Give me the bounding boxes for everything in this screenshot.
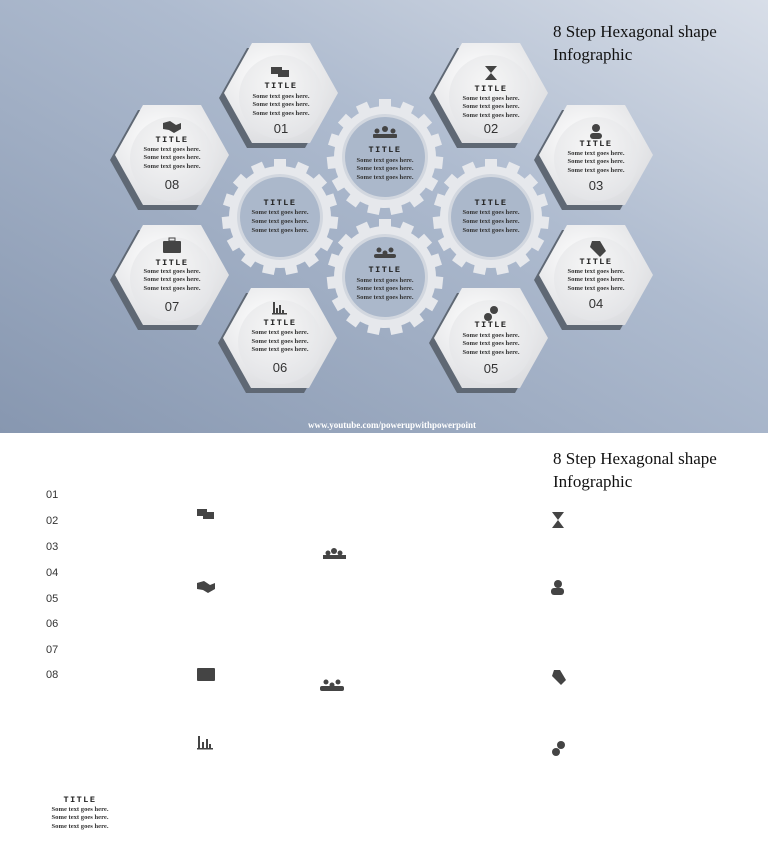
gear: right: Some text goes here. <box>462 218 520 225</box>
hex 03 <box>534 105 653 210</box>
title: 8 Step Hexagonal shape <box>553 22 717 41</box>
number list: 01 <box>46 489 58 501</box>
hex 07 <box>110 225 229 330</box>
bottom text block: TITLE <box>63 795 97 805</box>
gear: right: Some text goes here. <box>462 227 520 234</box>
footer url: www.youtube.com/powerupwithpowerpoint <box>308 420 476 430</box>
hex 04: 04 <box>589 296 603 311</box>
number list: 03 <box>46 541 58 553</box>
hex 03: Some text goes here. <box>567 150 625 157</box>
hex 06: Some text goes here. <box>251 329 309 336</box>
gear: top: Some text goes here. <box>356 165 414 172</box>
hex 01: Some text goes here. <box>252 101 310 108</box>
hex 04: TITLE <box>579 257 613 267</box>
hex 08: Some text goes here. <box>143 163 201 170</box>
hex 01: Some text goes here. <box>252 110 310 117</box>
title <box>553 22 717 64</box>
loose icons <box>197 509 566 756</box>
gear: right: TITLE <box>474 198 508 208</box>
bottom text block <box>51 795 109 830</box>
hex 02: TITLE <box>474 84 508 94</box>
hex 04: Some text goes here. <box>567 268 625 275</box>
gear: left: Some text goes here. <box>251 209 309 216</box>
hex 05 <box>429 288 548 393</box>
hex 02: Some text goes here. <box>462 112 520 119</box>
number list <box>46 489 58 681</box>
hex 05: TITLE <box>474 320 508 330</box>
gear: left <box>222 159 338 275</box>
hex 03: Some text goes here. <box>567 158 625 165</box>
hex 07: Some text goes here. <box>143 268 201 275</box>
bottom text block: Some text goes here. <box>51 814 109 821</box>
hex 02: Some text goes here. <box>462 95 520 102</box>
hex 07: 07 <box>165 299 179 314</box>
gear: top: Some text goes here. <box>356 174 414 181</box>
hex 05: Some text goes here. <box>462 340 520 347</box>
hex 01: Some text goes here. <box>252 93 310 100</box>
hex 08: 08 <box>165 177 179 192</box>
number list: 07 <box>46 644 58 656</box>
hex 03: TITLE <box>579 139 613 149</box>
title copy <box>553 449 717 491</box>
hex 02 <box>429 43 548 148</box>
gear: top: TITLE <box>368 145 402 155</box>
hex 05: Some text goes here. <box>462 332 520 339</box>
hex 02: 02 <box>484 121 498 136</box>
gear: top: Some text goes here. <box>356 157 414 164</box>
number list: 06 <box>46 618 58 630</box>
hex 04 <box>534 225 653 330</box>
hex 08: Some text goes here. <box>143 154 201 161</box>
gear: right: Some text goes here. <box>462 209 520 216</box>
hex 06: TITLE <box>263 318 297 328</box>
hex 08: TITLE <box>155 135 189 145</box>
number list: 08 <box>46 669 58 681</box>
gear: bottom: Some text goes here. <box>356 285 414 292</box>
hex 06 <box>218 288 337 393</box>
gear: left: Some text goes here. <box>251 227 309 234</box>
title copy: Infographic <box>553 472 633 491</box>
hex 04: Some text goes here. <box>567 285 625 292</box>
number list: 05 <box>46 593 58 605</box>
gear: right <box>433 159 549 275</box>
hex 08 <box>110 105 229 210</box>
hex 06: Some text goes here. <box>251 346 309 353</box>
gear: bottom: TITLE <box>368 265 402 275</box>
hex 03: Some text goes here. <box>567 167 625 174</box>
hex 05: Some text goes here. <box>462 349 520 356</box>
hex 03: 03 <box>589 178 603 193</box>
title: Infographic <box>553 45 633 64</box>
hex 01: 01 <box>274 121 288 136</box>
hex 06: Some text goes here. <box>251 338 309 345</box>
hex 07: Some text goes here. <box>143 285 201 292</box>
title copy: 8 Step Hexagonal shape <box>553 449 717 468</box>
hex 04: Some text goes here. <box>567 276 625 283</box>
hex 08: Some text goes here. <box>143 146 201 153</box>
hex 06: 06 <box>273 360 287 375</box>
gear: top <box>327 99 443 215</box>
hex 07: Some text goes here. <box>143 276 201 283</box>
number list: 02 <box>46 515 58 527</box>
hex 01 <box>219 43 338 148</box>
gear: left: Some text goes here. <box>251 218 309 225</box>
number list: 04 <box>46 567 58 579</box>
gear: bottom <box>327 219 443 335</box>
gear: bottom: Some text goes here. <box>356 277 414 284</box>
gear: bottom: Some text goes here. <box>356 294 414 301</box>
bottom text block: Some text goes here. <box>51 823 109 830</box>
hex 02: Some text goes here. <box>462 103 520 110</box>
gear: left: TITLE <box>263 198 297 208</box>
hex 01: TITLE <box>264 81 298 91</box>
background panel <box>0 0 768 433</box>
hex 07: TITLE <box>155 258 189 268</box>
hex 05: 05 <box>484 361 498 376</box>
bottom text block: Some text goes here. <box>51 806 109 813</box>
